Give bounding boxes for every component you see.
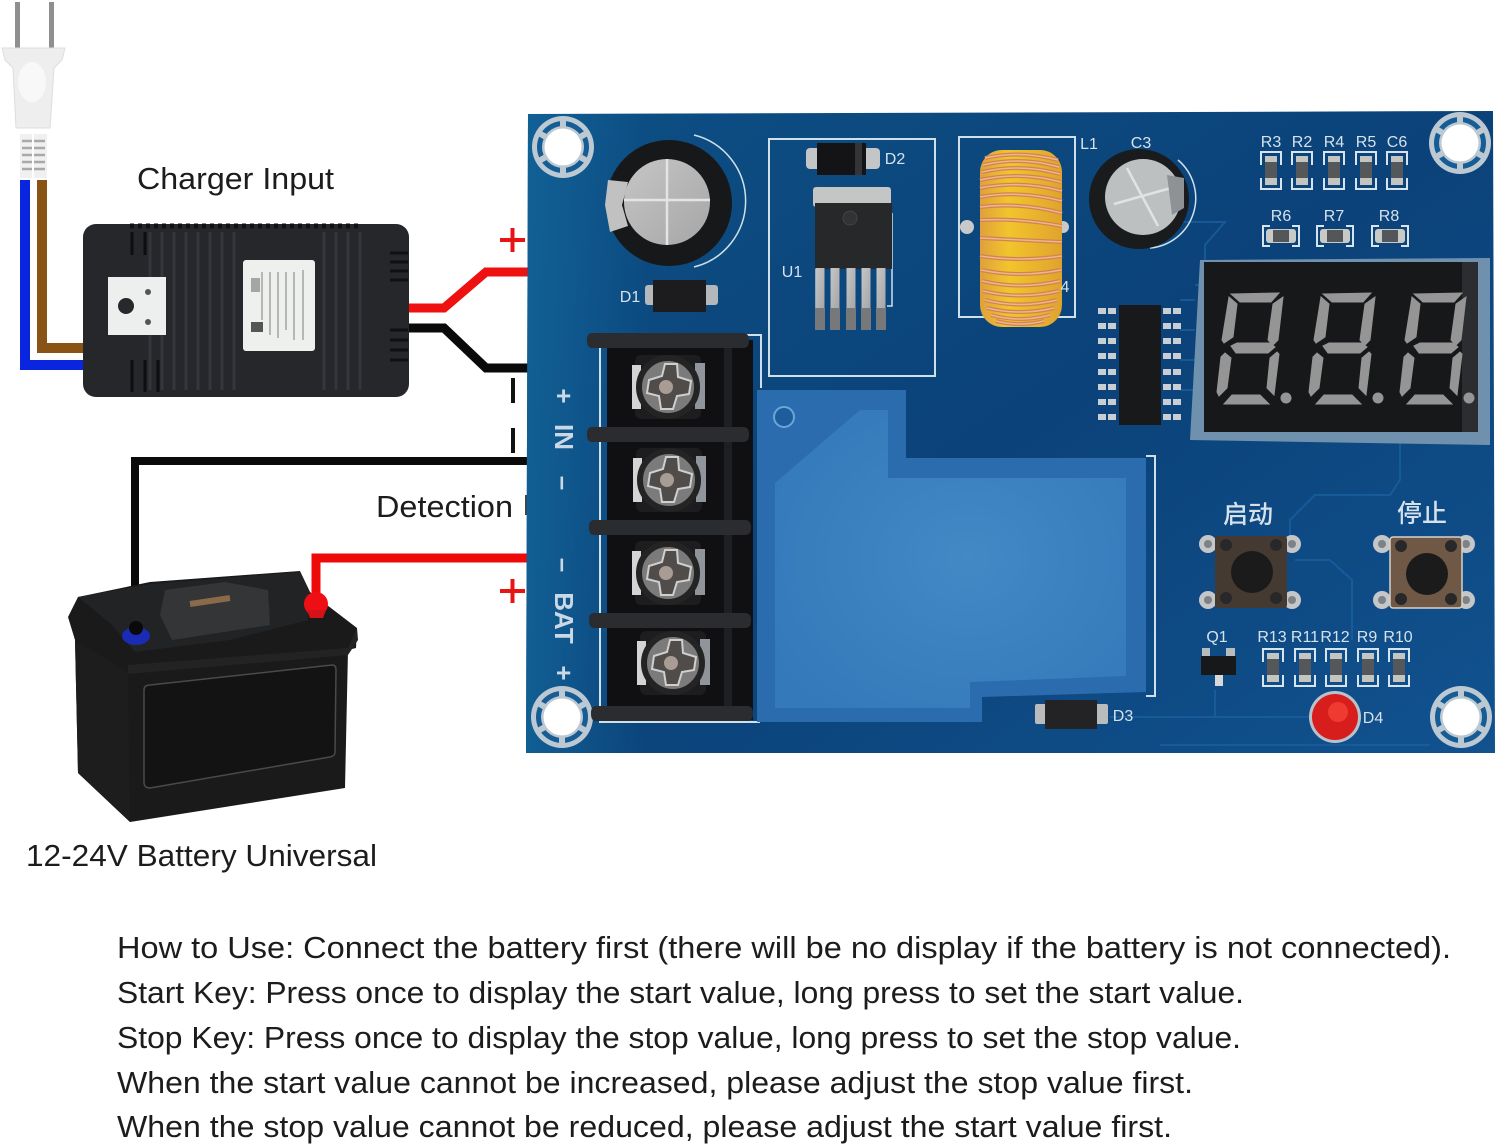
board terminal labels: + [549, 665, 579, 681]
component reference labels: D2 [885, 151, 905, 168]
diode D1 [645, 280, 718, 312]
label: 12-24V Battery Universal: 12-24V Battery Universal [26, 838, 377, 873]
seven-segment display [1190, 258, 1490, 445]
resistor row R6 R7 R8 [1263, 226, 1408, 246]
stop button: 停止 [1397, 494, 1447, 530]
pcb base [526, 111, 1495, 753]
component reference labels: R6 [1271, 208, 1291, 225]
board terminal labels: – [549, 558, 579, 572]
icon: charger [83, 224, 409, 397]
diode D2 [806, 143, 880, 175]
capacitor C1 [605, 140, 732, 266]
component reference labels: D1 [620, 289, 640, 306]
instructions text block [117, 930, 1451, 1144]
component reference labels: D3 [1113, 708, 1133, 725]
component reference labels: R13 [1257, 629, 1287, 646]
component reference labels: R11 [1291, 629, 1319, 646]
component reference labels: R12 [1320, 629, 1350, 646]
silkscreen outlines [600, 135, 1196, 722]
component reference labels: R3 [1261, 134, 1281, 151]
resistor row R3 R2 R4 R5 C6 [1261, 152, 1407, 189]
component reference labels: R10 [1383, 629, 1413, 646]
regulator U1 [813, 187, 892, 330]
battery wires [135, 461, 528, 625]
stop button [1373, 494, 1475, 609]
start button: 启动 [1223, 495, 1273, 531]
plus sign: battery [500, 579, 525, 603]
relay cover [757, 390, 1146, 722]
resistor row R13 R11 R12 R9 R10 [1263, 649, 1409, 686]
output wires to the board [408, 272, 528, 453]
component reference labels: Q1 [1206, 629, 1228, 646]
board terminal labels [549, 388, 579, 681]
icon: mains plug [2, 2, 65, 178]
heading: Charger Input: Charger Input [137, 161, 334, 196]
terminal block [587, 333, 753, 721]
component reference labels: C3 [1131, 135, 1151, 152]
start button [1199, 495, 1301, 609]
component reference labels: R4 [1324, 134, 1344, 151]
IC chip [1098, 305, 1181, 425]
component reference labels: R7 [1324, 208, 1344, 225]
component reference labels: U1 [782, 264, 802, 281]
mounting holes [531, 112, 1492, 748]
component reference labels: R5 [1356, 134, 1376, 151]
board terminal labels: – [549, 476, 579, 490]
capacitor C3 [1089, 149, 1189, 249]
toroid inductor L1 [960, 150, 1069, 327]
left edge tint [526, 114, 650, 753]
copper traces [1095, 222, 1430, 745]
instructions text block: How to Use: Connect the battery first (there will be no display if the battery is not connected). [117, 930, 1451, 965]
icon: car battery [68, 571, 358, 822]
label: Detection: Detection [376, 489, 513, 524]
component reference labels [620, 134, 1413, 727]
board terminal labels: + [549, 388, 579, 404]
instructions text block: Stop Key: Press once to display the stop value, long press to set the stop value. [117, 1020, 1241, 1055]
diode D3 [1035, 700, 1108, 729]
instructions text block: Start Key: Press once to display the start value, long press to set the start value. [117, 975, 1244, 1010]
panel: controller board [526, 111, 1495, 753]
mains wires [25, 180, 86, 365]
board terminal labels: BAT [549, 592, 579, 644]
transistor Q1 [1201, 648, 1236, 686]
component reference labels: R2 [1292, 134, 1312, 151]
LED D4 [1309, 691, 1361, 743]
component reference labels: C6 [1387, 134, 1407, 151]
detection tick mark [525, 495, 528, 515]
instructions text block: When the start value cannot be increased, please adjust the stop value first. [117, 1065, 1193, 1100]
component reference labels: D4 [1363, 710, 1383, 727]
component reference labels: L1 [1080, 136, 1098, 153]
component reference labels: 4 [1061, 279, 1070, 296]
instructions text block: When the stop value cannot be reduced, please adjust the start value first. [117, 1109, 1172, 1144]
plus sign: charger [500, 228, 525, 252]
board terminal labels: IN [549, 424, 579, 450]
component reference labels: R8 [1379, 208, 1399, 225]
component reference labels: R9 [1357, 629, 1377, 646]
